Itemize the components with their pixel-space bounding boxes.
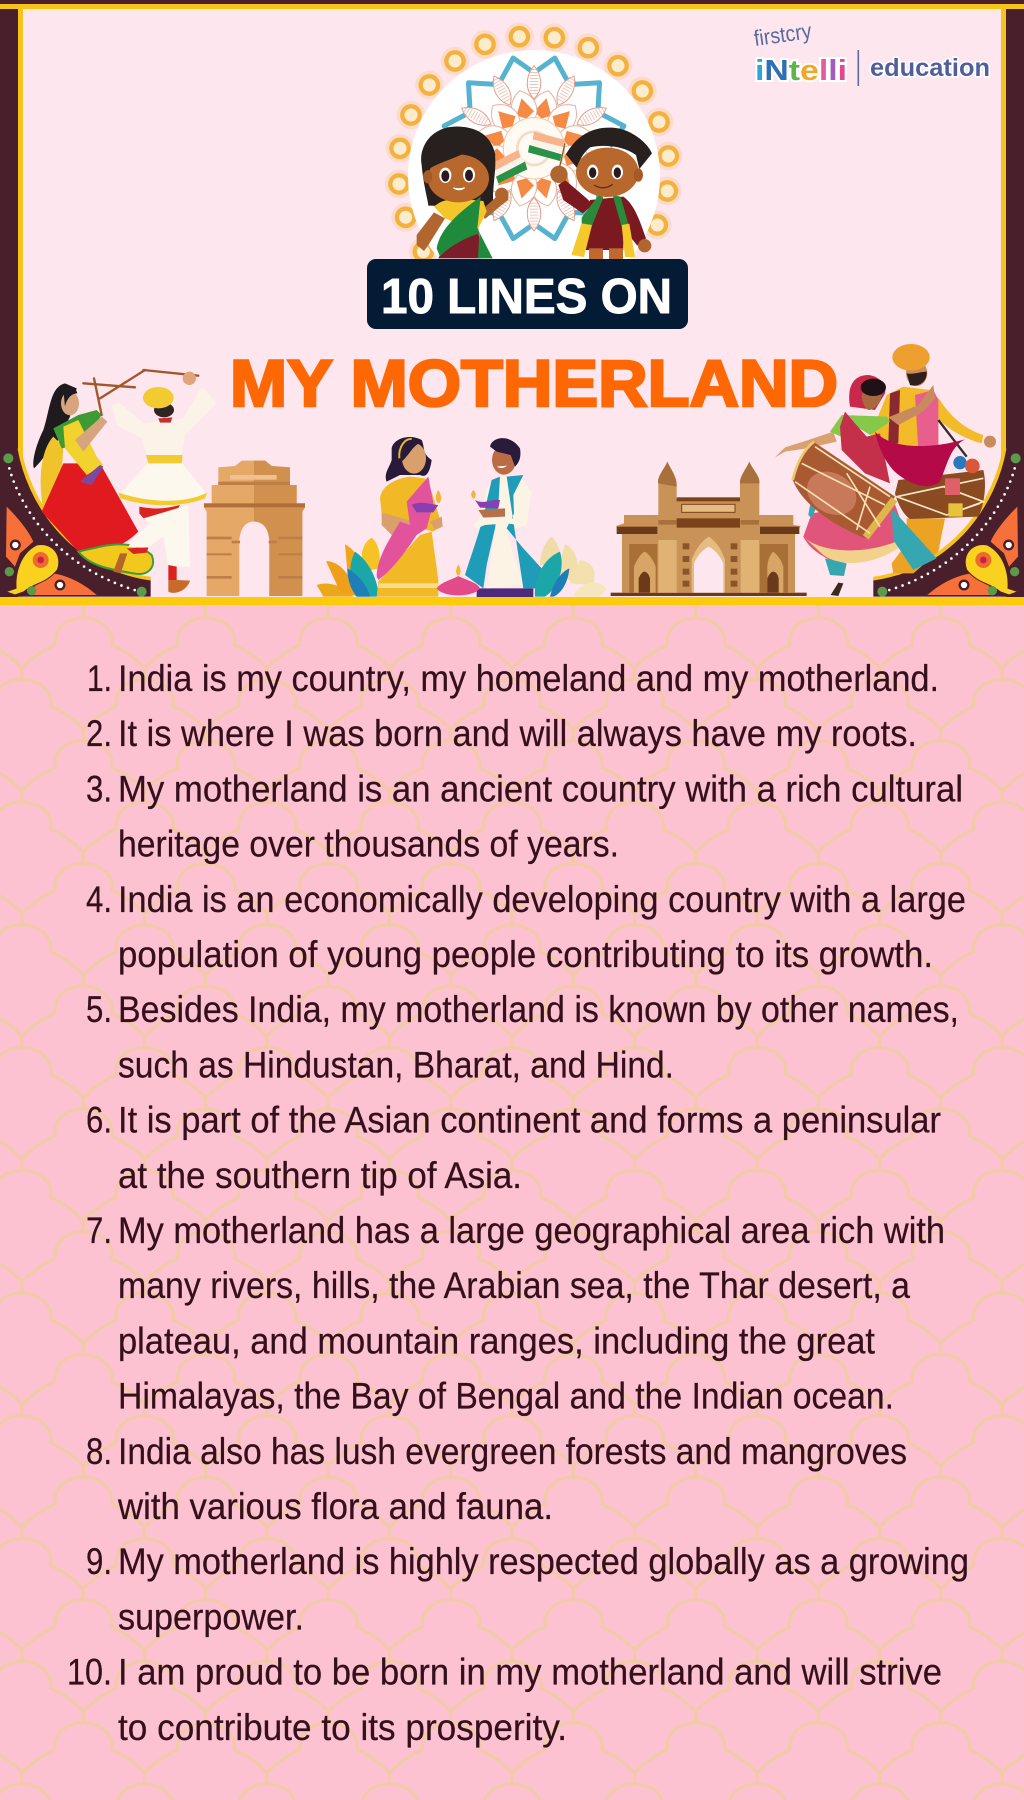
logo: firstcry intelli education: firstcry: [752, 18, 813, 51]
item 5: 5.: [86, 988, 112, 1030]
item 2: 2.: [86, 712, 112, 754]
ten lines list: [67, 657, 969, 1748]
item 2: It is where I was born and will always have my roots.: [118, 712, 917, 754]
dandiya sticks: [83, 370, 198, 415]
logo: firstcry intelli education: education: [870, 54, 990, 82]
woman: [775, 375, 965, 596]
item 3: My motherland is an ancient country with a rich cultural: [118, 767, 963, 809]
man with diya: [465, 438, 542, 597]
lotus right: [535, 537, 607, 597]
item 7: plateau, and mountain ranges, including the great: [118, 1319, 876, 1361]
lotus left: [317, 538, 380, 597]
item 7: Himalayas, the Bay of Bengal and the Indian ocean.: [118, 1375, 894, 1417]
item 6: It is part of the Asian continent and forms a peninsular: [118, 1099, 941, 1141]
emblem: mandala circle with rings and kids: [385, 22, 683, 266]
item 8: India also has lush evergreen forests and mangroves: [118, 1430, 907, 1472]
item 9: 9.: [86, 1540, 112, 1582]
item 4: India is an economically developing country with a large: [118, 878, 966, 920]
content background with scallop pattern: [0, 605, 1024, 1800]
item 8: [86, 1430, 907, 1527]
logo: firstcry intelli education: iNtelli: [755, 55, 847, 87]
girl: [417, 127, 508, 258]
woman dancer: [33, 383, 153, 574]
item 3: heritage over thousands of years.: [118, 823, 619, 865]
item 7: My motherland has a large geographical area rich with: [118, 1209, 945, 1251]
title box: 10 LINES ON: 10 LINES ON: [381, 270, 672, 324]
bottom band: [0, 597, 1024, 605]
crimson scarf: [875, 432, 965, 486]
item 4: 4.: [86, 878, 112, 920]
item 6: [86, 1099, 941, 1196]
item 3: [86, 767, 963, 865]
item 9: [86, 1540, 969, 1637]
dhol: [793, 442, 895, 538]
item 6: at the southern tip of Asia.: [118, 1154, 522, 1196]
item 10: [67, 1651, 942, 1748]
item 4: population of young people contributing to its growth.: [118, 933, 933, 975]
garba dancers: [33, 370, 217, 593]
item 1: India is my country, my homeland and my motherland.: [118, 657, 939, 699]
item 1: 1.: [87, 657, 112, 699]
item 10: 10.: [67, 1651, 112, 1693]
India Gate: [204, 461, 305, 596]
man dancer: [112, 372, 217, 593]
header panel: [0, 0, 1024, 600]
item 10: I am proud to be born in my motherland and will strive: [118, 1651, 942, 1693]
item 8: with various flora and fauna.: [117, 1485, 553, 1527]
Gateway of India: [611, 462, 807, 596]
item 7: [86, 1209, 945, 1417]
ring border: [385, 22, 683, 266]
man: [865, 344, 996, 573]
boy: [550, 128, 652, 259]
flag boy: [528, 132, 565, 168]
item 6: 6.: [86, 1099, 112, 1141]
item 4: [86, 878, 966, 975]
item 7: many rivers, hills, the Arabian sea, the Thar desert, a: [118, 1264, 910, 1306]
back drum: [895, 470, 985, 519]
item 10: to contribute to its prosperity.: [118, 1706, 567, 1748]
right corner ornament: [873, 448, 1024, 597]
item 9: superpower.: [118, 1595, 304, 1637]
item 5: [86, 988, 959, 1085]
item 5: Besides India, my motherland is known by other names,: [118, 988, 959, 1030]
white disc: [408, 50, 660, 260]
item 5: such as Hindustan, Bharat, and Hind.: [118, 1043, 674, 1085]
logo: firstcry intelli education: [752, 18, 990, 87]
item 3: 3.: [86, 767, 112, 809]
flag girl: [492, 150, 527, 183]
bhangra dancers with drum: [775, 344, 996, 596]
item 7: 7.: [86, 1209, 112, 1251]
item 8: 8.: [86, 1430, 112, 1472]
woman with diya: [317, 437, 443, 597]
title: MY MOTHERLAND: MY MOTHERLAND: [230, 346, 838, 420]
left corner ornament: [0, 448, 151, 597]
item 9: My motherland is highly respected globally as a growing: [118, 1540, 969, 1582]
mandala: [440, 54, 628, 242]
diya: [437, 564, 480, 595]
